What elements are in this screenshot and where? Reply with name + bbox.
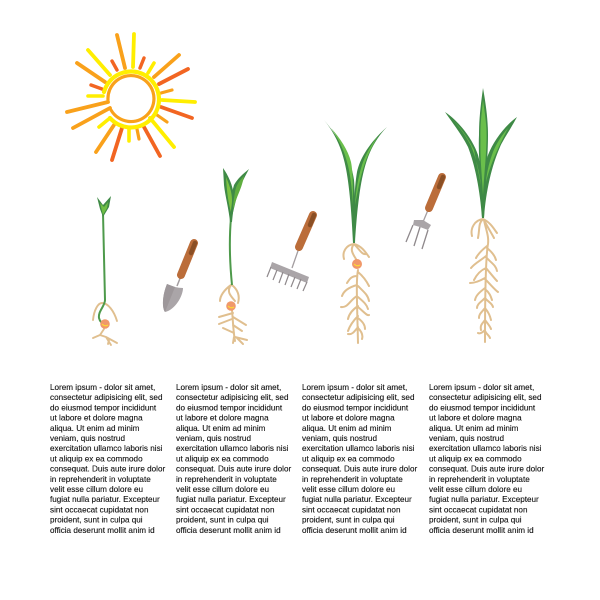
text column 1: fugiat nulla pariatur. Excepteur [50, 495, 160, 504]
text column 3: do eiusmod tempor incididunt [302, 403, 409, 412]
text column 1: officia deserunt mollit anim id [50, 526, 155, 535]
icon: trowel [163, 243, 195, 312]
text column 4: veniam, quis nostrud [429, 434, 504, 443]
text column 4: officia deserunt mollit anim id [429, 526, 534, 535]
plant: stage one seedling [93, 196, 117, 345]
text column 4: aliqua. Ut enim ad minim [429, 424, 519, 433]
plant: stage three seedling [324, 120, 387, 343]
plant: stage two seedling [219, 168, 249, 344]
text column 3: in reprehenderit in voluptate [302, 475, 403, 484]
icon: garden fork [406, 177, 443, 249]
text column 1: ut aliquip ex ea commodo [50, 454, 143, 463]
text column 3: sint occaecat cupidatat non [302, 505, 400, 514]
text column 1: consectetur adipisicing elit, sed [50, 393, 162, 402]
text column 3: consequat. Duis aute irure dolor [302, 465, 417, 474]
text column 4: exercitation ullamco laboris nisi [429, 444, 542, 453]
text column 2: consectetur adipisicing elit, sed [176, 393, 288, 402]
text column 1: veniam, quis nostrud [50, 434, 125, 443]
text column 2: fugiat nulla pariatur. Excepteur [176, 495, 286, 504]
text column 4: sint occaecat cupidatat non [429, 505, 527, 514]
text column 3: Lorem ipsum - dolor sit amet, [302, 383, 407, 392]
text column 4: in reprehenderit in voluptate [429, 475, 530, 484]
text column 2: ut aliquip ex ea commodo [176, 454, 269, 463]
text column 3: fugiat nulla pariatur. Excepteur [302, 495, 412, 504]
text column 2 [176, 383, 291, 535]
text column 4: ut aliquip ex ea commodo [429, 454, 522, 463]
text column 4: ut labore et dolore magna [429, 414, 522, 423]
text column 4: proident, sunt in culpa qui [429, 516, 522, 525]
text column 2: in reprehenderit in voluptate [176, 475, 277, 484]
text column 3: veniam, quis nostrud [302, 434, 377, 443]
text column 4: velit esse cillum dolore eu [429, 485, 522, 494]
text column 3: velit esse cillum dolore eu [302, 485, 395, 494]
text column 2: aliqua. Ut enim ad minim [176, 424, 266, 433]
text column 1: in reprehenderit in voluptate [50, 475, 151, 484]
text column 3: aliqua. Ut enim ad minim [302, 424, 392, 433]
text column 2: veniam, quis nostrud [176, 434, 251, 443]
text column 1: do eiusmod tempor incididunt [50, 403, 157, 412]
text column 1: consequat. Duis aute irure dolor [50, 465, 165, 474]
text column 3: proident, sunt in culpa qui [302, 516, 395, 525]
text column 3: exercitation ullamco laboris nisi [302, 444, 415, 453]
text column 2: do eiusmod tempor incididunt [176, 403, 283, 412]
text column 1: Lorem ipsum - dolor sit amet, [50, 383, 155, 392]
text column 2: Lorem ipsum - dolor sit amet, [176, 383, 281, 392]
text column 2: consequat. Duis aute irure dolor [176, 465, 291, 474]
text column 2: exercitation ullamco laboris nisi [176, 444, 289, 453]
text column 1: aliqua. Ut enim ad minim [50, 424, 140, 433]
text column 2: ut labore et dolore magna [176, 414, 269, 423]
text column 2: proident, sunt in culpa qui [176, 516, 269, 525]
text column 2: velit esse cillum dolore eu [176, 485, 269, 494]
text column 1: exercitation ullamco laboris nisi [50, 444, 163, 453]
text column 3: consectetur adipisicing elit, sed [302, 393, 414, 402]
text column 4: Lorem ipsum - dolor sit amet, [429, 383, 534, 392]
text column 3: ut aliquip ex ea commodo [302, 454, 395, 463]
text column 4: do eiusmod tempor incididunt [429, 403, 536, 412]
text column 4: consectetur adipisicing elit, sed [429, 393, 541, 402]
text column 1 [50, 383, 165, 535]
text column 1: sint occaecat cupidatat non [50, 505, 148, 514]
text column 4 [429, 383, 544, 535]
text column 3: ut labore et dolore magna [302, 414, 395, 423]
text column 1: proident, sunt in culpa qui [50, 516, 143, 525]
text column 1: ut labore et dolore magna [50, 414, 143, 423]
text column 3: officia deserunt mollit anim id [302, 526, 407, 535]
text column 4: consequat. Duis aute irure dolor [429, 465, 544, 474]
text column 4: fugiat nulla pariatur. Excepteur [429, 495, 539, 504]
text column 2: officia deserunt mollit anim id [176, 526, 281, 535]
icon: rake [267, 215, 314, 291]
icon: sun [67, 34, 195, 160]
text column 1: velit esse cillum dolore eu [50, 485, 143, 494]
text column 3 [302, 383, 417, 535]
text column 2: sint occaecat cupidatat non [176, 505, 274, 514]
plant: stage four mature plant [445, 88, 517, 342]
